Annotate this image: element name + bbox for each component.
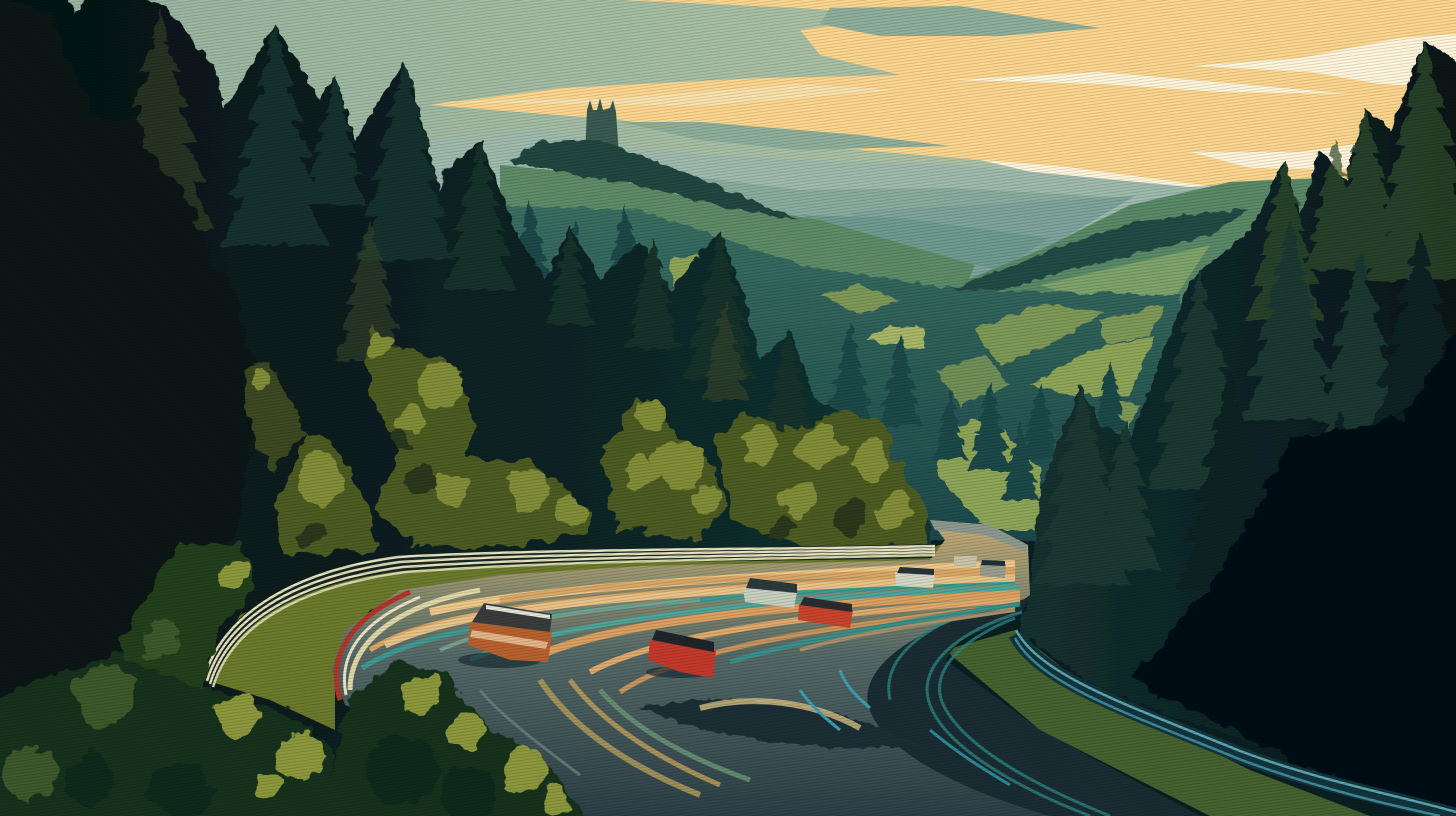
right forest deep shadow [1130,300,1456,816]
car: red mid [798,597,853,628]
foreground foliage lower left [0,540,590,816]
car: silver mid [743,578,797,608]
left forest deep shadow [0,0,260,720]
hill: right green slope [930,178,1320,330]
car: far white [895,567,935,588]
left dark forest [0,0,930,816]
distant hills [430,130,1300,300]
grass verge left [205,540,955,730]
valley forest [500,200,1180,540]
castle [585,98,619,156]
sunlit foliage clusters [245,325,925,555]
right dark forest [1018,40,1456,816]
right striped barrier [1015,630,1456,816]
car: far pair [954,556,1006,578]
sky [0,0,1456,320]
grass verge right [945,630,1370,816]
left striped barrier [204,546,935,687]
car: red centre [646,630,716,678]
hill: left green slope with tree line [500,140,975,300]
track surface [332,520,1200,816]
clouds [430,34,1456,190]
car: large left [458,603,552,668]
